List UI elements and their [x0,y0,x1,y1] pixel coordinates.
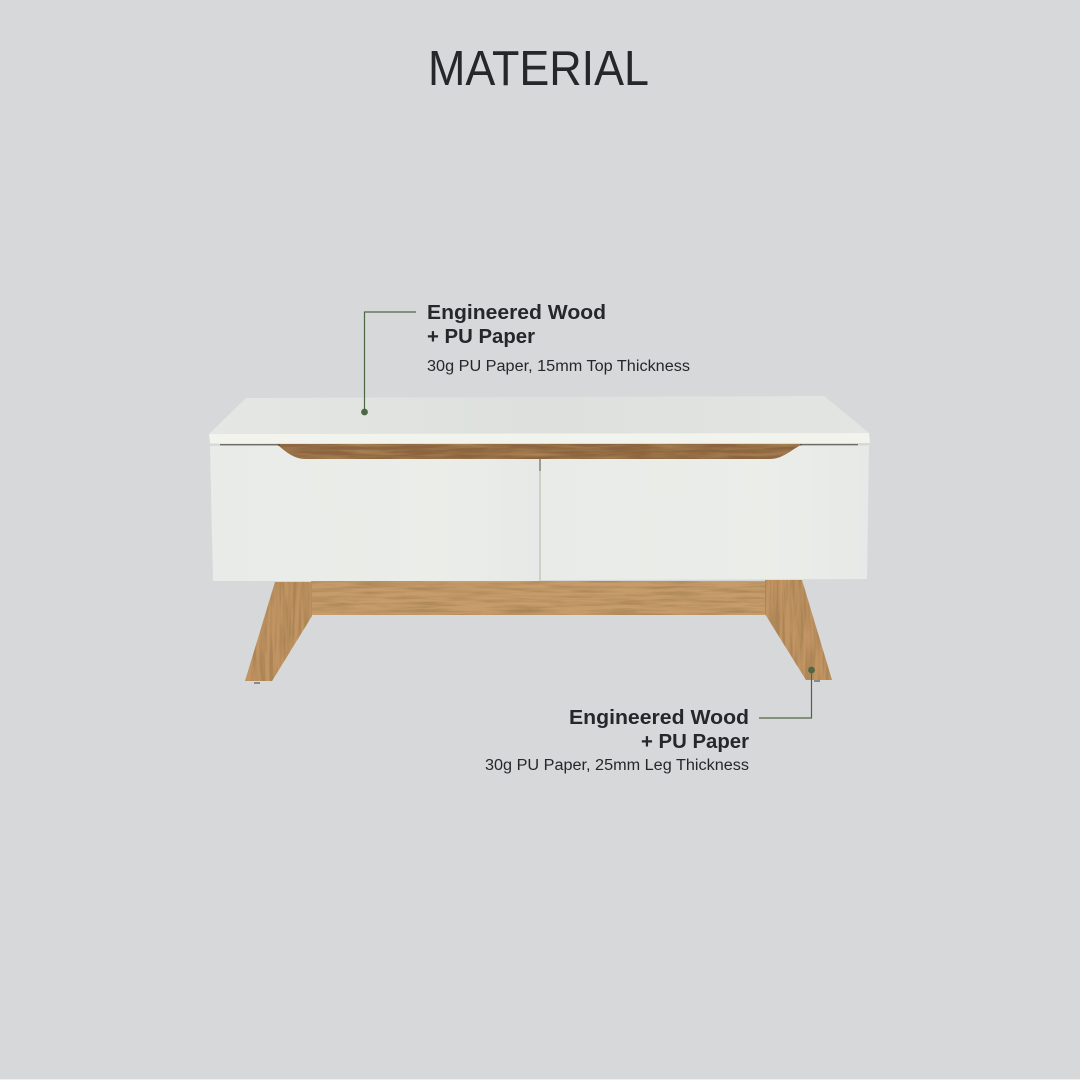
shadow gaps [220,444,858,446]
callout: top material [361,301,690,415]
rail: wood stretcher [311,581,766,615]
heading: leg material: + PU Paper [641,730,749,753]
detail: top material: 30g PU Paper, 15mm Top Thickness [427,358,690,375]
left drawer [210,446,539,581]
right leg [765,580,832,680]
bottom edge line [0,1079,1080,1080]
furniture: TV console [209,396,870,684]
leader line: leg [759,670,812,718]
heading: top material: + PU Paper [427,325,535,348]
dot: leg [808,667,815,673]
heading: top material: Engineered Wood [427,301,606,324]
right drawer [541,446,869,580]
leg feet [254,680,820,684]
title: MATERIAL [428,42,649,96]
table top surface [209,396,869,434]
detail: leg material: 30g PU Paper, 25mm Leg Thickness [485,757,749,774]
drawer gap [539,459,541,581]
left leg [245,582,312,681]
callout: leg material [485,667,815,774]
wood recess behind drawers [278,444,802,460]
heading: leg material: Engineered Wood [569,706,749,729]
drawer gap shadow [540,459,541,471]
table top front edge [209,433,870,444]
dot: top [361,409,368,415]
leader line: top [364,312,416,412]
